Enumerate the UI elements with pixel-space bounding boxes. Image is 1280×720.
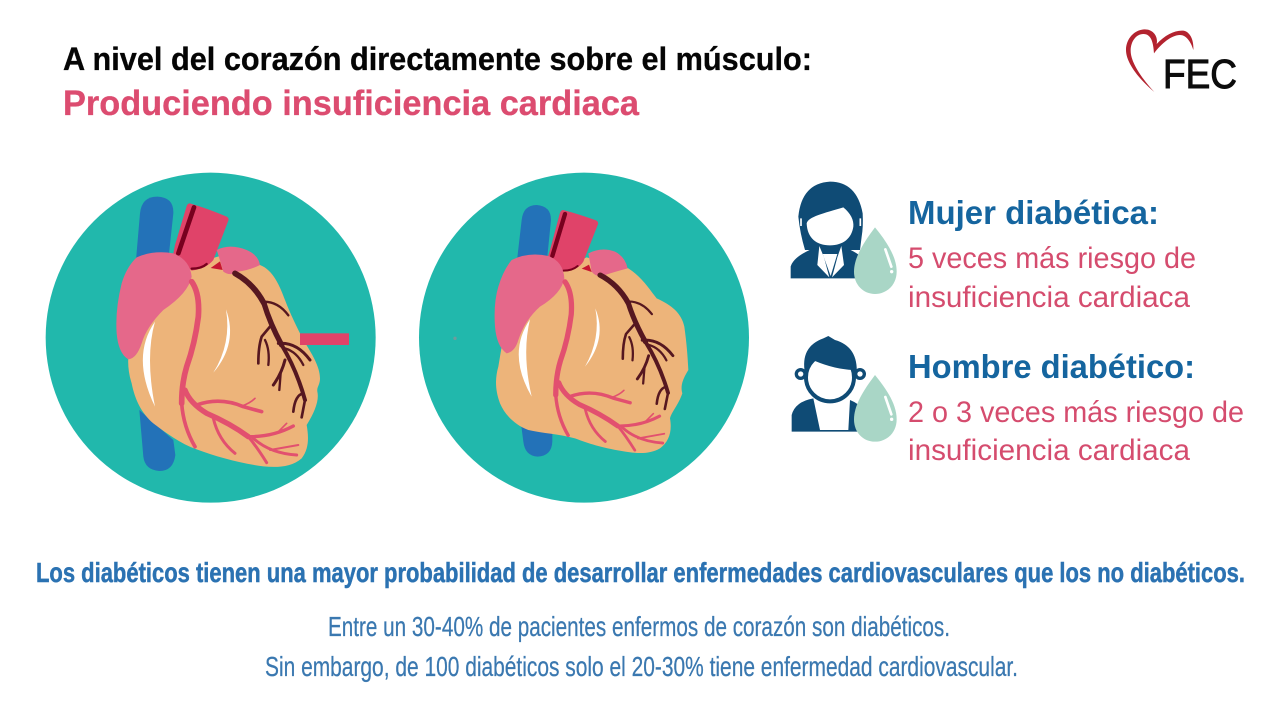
icon: diabetic woman (791, 182, 897, 294)
panel: risk by sex (791, 182, 1244, 467)
dark coronary vessels (600, 275, 673, 409)
text: woman: insuficiencia cardiaca (908, 281, 1190, 314)
right atrium (588, 250, 628, 276)
icon: blue vein (136, 197, 175, 471)
left atrium (495, 255, 564, 353)
aorta (548, 210, 598, 272)
statistic 2: Sin embargo, de 100 diabéticos solo el 20-30% tiene enfermedad cardiovascular. (265, 651, 1018, 682)
small dot (453, 337, 457, 340)
arrow bar (300, 333, 349, 345)
highlights (519, 308, 600, 397)
right atrium (217, 247, 260, 274)
panel: heart with arrow (46, 173, 376, 503)
logo text: FEC (1163, 51, 1237, 97)
text: woman: Mujer diabética: (908, 194, 1159, 231)
highlights (143, 309, 230, 407)
text: woman (908, 194, 1196, 314)
pink coronary vessels (556, 282, 664, 450)
aorta (173, 203, 229, 271)
text: man: Hombre diabético: (908, 348, 1195, 385)
left atrium (116, 252, 192, 359)
text: man: 2 o 3 veces más riesgo de (908, 396, 1244, 429)
text block: conclusion (36, 557, 1245, 682)
statistic 1: Entre un 30-40% de pacientes enfermos de corazón son diabéticos. (328, 611, 950, 642)
text: woman: 5 veces más riesgo de (908, 242, 1196, 275)
teal circle (46, 173, 376, 503)
icon: diabetic man (792, 336, 897, 442)
heart muscle (496, 257, 688, 453)
teal circle (419, 173, 749, 503)
dark coronary vessels (235, 273, 310, 417)
heading line 1: A nivel del corazón directamente sobre el músculo: (63, 41, 812, 77)
title (63, 41, 812, 123)
heart muscle (128, 256, 320, 467)
icon: logo heart (1126, 29, 1193, 92)
panel: heart enlarged (419, 173, 749, 503)
icon: blue vein (517, 205, 552, 457)
text: man (908, 348, 1244, 467)
text: man: insuficiencia cardiaca (908, 434, 1190, 467)
heading line 2: Produciendo insuficiencia cardiaca (63, 84, 640, 123)
pink coronary vessels (182, 282, 298, 463)
logo: FEC (1126, 29, 1237, 97)
